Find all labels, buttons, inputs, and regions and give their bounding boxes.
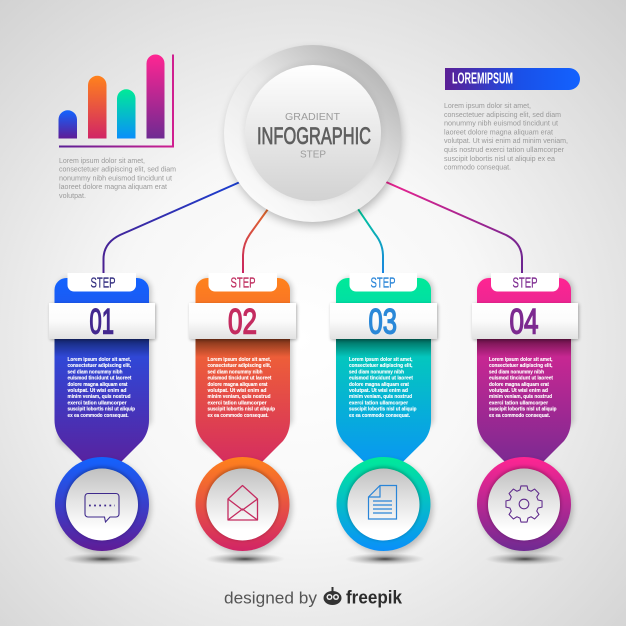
description: consectetuer adipiscing elit, [349, 363, 413, 369]
panel: step 4 [472, 273, 579, 565]
left text block: consectetuer adipiscing elit, sed diam [59, 165, 176, 174]
left text block: nonummy nibh euismod tincidunt ut [59, 173, 173, 182]
description: minim veniam, quis nostrud [349, 394, 412, 400]
description: euismod tincidunt ut laoreet [208, 376, 272, 382]
right text block: commodo consequat. [444, 163, 511, 172]
description: ex ea commodo consequat. [349, 413, 410, 419]
right text block: nonummy nibh euismod tincidunt ut [444, 119, 559, 128]
description: minim veniam, quis nostrud [489, 394, 552, 400]
description: consectetuer adipiscing elit, [68, 363, 131, 369]
description: minim veniam, quis nostrud [208, 394, 271, 400]
description: sed diam nonummy nibh [208, 369, 263, 375]
card body [336, 278, 433, 481]
heading pill: lorem ipsum [445, 68, 580, 90]
step tab: STEP [230, 276, 256, 292]
step tab [350, 273, 417, 292]
description [349, 357, 417, 419]
panel: step 2 [189, 273, 297, 565]
number band: 01 [90, 302, 114, 342]
description: dolore magna aliquam erat [208, 382, 268, 388]
icon: document [368, 486, 396, 519]
ground shadow [485, 553, 565, 565]
left text block: volutpat. [59, 191, 86, 200]
icon: chat bubble [85, 494, 119, 522]
step tab: STEP [370, 276, 396, 292]
description: dolore magna aliquam erat [489, 382, 549, 388]
right text block: Lorem ipsum dolor sit amet, [444, 101, 531, 110]
description: exerci tation ullamcorper [349, 400, 409, 406]
panel: step 1 [49, 273, 156, 565]
description: consectetuer adipiscing elit, [489, 363, 553, 369]
description: Lorem ipsum dolor sit amet, [489, 357, 553, 363]
number band: 02 [228, 302, 257, 342]
icon medallion [336, 457, 433, 554]
connector lines [104, 182, 522, 274]
central title circle [224, 45, 401, 225]
description: Lorem ipsum dolor sit amet, [68, 357, 131, 363]
right text block: volutpat. Ut wisi enim ad minim veniam, [444, 136, 568, 145]
description [68, 357, 135, 419]
description [208, 357, 275, 419]
title text: STEP [300, 148, 326, 160]
footer credit: designed by [224, 588, 318, 608]
card body [196, 278, 292, 481]
description: suscipit lobortis nisl ut aliquip [349, 407, 417, 413]
card body [477, 278, 573, 481]
number band [330, 302, 438, 342]
right text block: quis nostrud exerci tation ullamcorper [444, 145, 564, 154]
heading pill: lorem ipsum: LOREMIPSUM [452, 71, 513, 88]
step tab: STEP [512, 276, 538, 292]
icon: freepik mascot [324, 587, 342, 605]
ground shadow [205, 553, 285, 565]
description: exerci tation ullamcorper [208, 400, 267, 406]
title text: GRADIENT [285, 111, 341, 123]
description: Lorem ipsum dolor sit amet, [208, 357, 271, 363]
description: ex ea commodo consequat. [489, 413, 550, 419]
description [489, 357, 557, 419]
description: minim veniam, quis nostrud [68, 394, 131, 400]
description: volutpat. Ut wisi enim ad [349, 388, 409, 394]
description: volutpat. Ut wisi enim ad [489, 388, 549, 394]
description: euismod tincidunt ut laoreet [489, 376, 553, 382]
description: ex ea commodo consequat. [68, 413, 129, 419]
left text block [59, 156, 176, 200]
number band [189, 302, 297, 342]
right text block: suscipit lobortis nisl ut aliquip ex ea [444, 154, 556, 163]
icon medallion [55, 457, 151, 554]
step tab [491, 273, 559, 292]
description: suscipit lobortis nisl ut aliquip [68, 407, 135, 413]
footer credit [224, 587, 403, 608]
number band: 04 [510, 302, 538, 342]
panel: step 3 [330, 273, 438, 565]
title text: INFOGRAPHIC [257, 123, 371, 150]
description: suscipit lobortis nisl ut aliquip [208, 407, 275, 413]
description: suscipit lobortis nisl ut aliquip [489, 407, 557, 413]
description: sed diam nonummy nibh [349, 369, 404, 375]
description: dolore magna aliquam erat [68, 382, 128, 388]
description: sed diam nonummy nibh [68, 369, 123, 375]
step tab: STEP [90, 276, 116, 292]
description: ex ea commodo consequat. [208, 413, 269, 419]
right text block: consectetuer adipiscing elit, sed diam [444, 110, 561, 119]
step tab [208, 273, 277, 292]
description: euismod tincidunt ut laoreet [68, 376, 132, 382]
ground shadow [63, 553, 143, 565]
right text block: laoreet dolore magna aliquam erat [444, 127, 554, 136]
description: exerci tation ullamcorper [68, 400, 127, 406]
description: euismod tincidunt ut laoreet [349, 376, 413, 382]
description: exerci tation ullamcorper [489, 400, 549, 406]
title text [257, 111, 371, 160]
number band [49, 302, 156, 342]
footer credit: freepik [346, 588, 403, 608]
ground shadow [345, 553, 425, 565]
icon medallion [196, 457, 292, 554]
card body [54, 278, 151, 481]
number band: 03 [368, 302, 397, 342]
description: volutpat. Ut wisi enim ad [68, 388, 127, 394]
bar chart [58, 54, 173, 146]
number band [472, 302, 579, 342]
left text block: laoreet dolore magna aliquam erat [59, 182, 168, 191]
icon medallion [477, 457, 573, 554]
description: dolore magna aliquam erat [349, 382, 409, 388]
description: volutpat. Ut wisi enim ad [208, 388, 267, 394]
description: consectetuer adipiscing elit, [208, 363, 271, 369]
description: Lorem ipsum dolor sit amet, [349, 357, 413, 363]
icon: open envelope [228, 486, 258, 520]
right text block [444, 101, 568, 172]
left text block: Lorem ipsum dolor sit amet, [59, 156, 145, 165]
icon: gear [506, 486, 542, 522]
description: sed diam nonummy nibh [489, 369, 544, 375]
step tab [68, 273, 136, 292]
